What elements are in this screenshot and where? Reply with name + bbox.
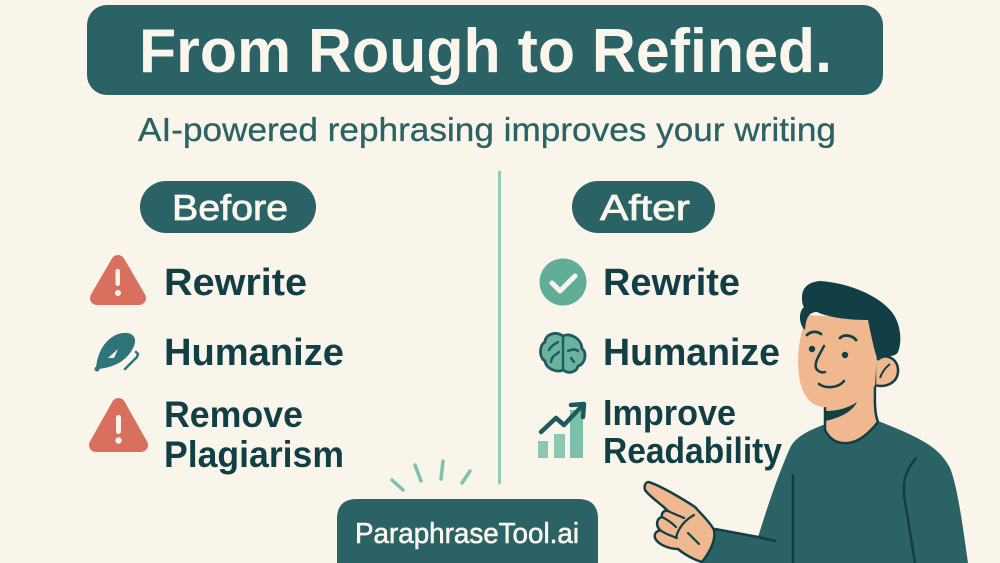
- item: remove plagiarism: Remove: [164, 394, 303, 435]
- before label pill: Before: [172, 187, 288, 228]
- icon: warning triangle: [96, 405, 141, 445]
- item: remove plagiarism: [164, 394, 344, 475]
- icon: pen leaf: [94, 333, 138, 372]
- icon: brain: [540, 334, 585, 372]
- subtitle: AI-powered rephrasing improves your writing: [138, 111, 836, 148]
- brand pill: ParaphraseTool.ai: [355, 518, 579, 550]
- nose and mouth: [816, 346, 844, 387]
- panel: before: [94, 181, 344, 475]
- sweater seams: [715, 458, 916, 563]
- icon: warning triangle: [97, 262, 139, 298]
- hair: [800, 281, 900, 361]
- item: improve readability: [603, 392, 782, 471]
- item: rewrite: Rewrite: [603, 262, 740, 304]
- brand pill: [337, 499, 598, 563]
- item: rewrite: Rewrite: [164, 262, 307, 304]
- hand: [645, 482, 714, 562]
- title banner: From Rough to Refined.: [139, 17, 832, 86]
- ear: [875, 356, 898, 386]
- sweater: [702, 421, 968, 563]
- item: remove plagiarism: Plagiarism: [164, 434, 344, 475]
- eyebrows and eyes: [807, 332, 856, 340]
- after label pill: [572, 181, 715, 233]
- after label pill: After: [600, 187, 690, 228]
- illustration: pointing man: [645, 281, 968, 563]
- icon: growth chart: [538, 404, 584, 458]
- icon: check circle: [540, 258, 586, 306]
- item: humanize: Humanize: [164, 332, 344, 374]
- panel: after: [538, 181, 782, 471]
- item: improve readability: Readability: [603, 430, 782, 471]
- face: [798, 315, 877, 407]
- item: improve readability: Improve: [603, 392, 736, 433]
- center divider: [498, 172, 501, 483]
- icon: spark lines: [392, 461, 470, 490]
- title banner: [87, 5, 883, 95]
- neck: [825, 385, 878, 443]
- before label pill: [140, 181, 316, 233]
- item: humanize: Humanize: [603, 332, 780, 374]
- chin shadow: [825, 402, 857, 421]
